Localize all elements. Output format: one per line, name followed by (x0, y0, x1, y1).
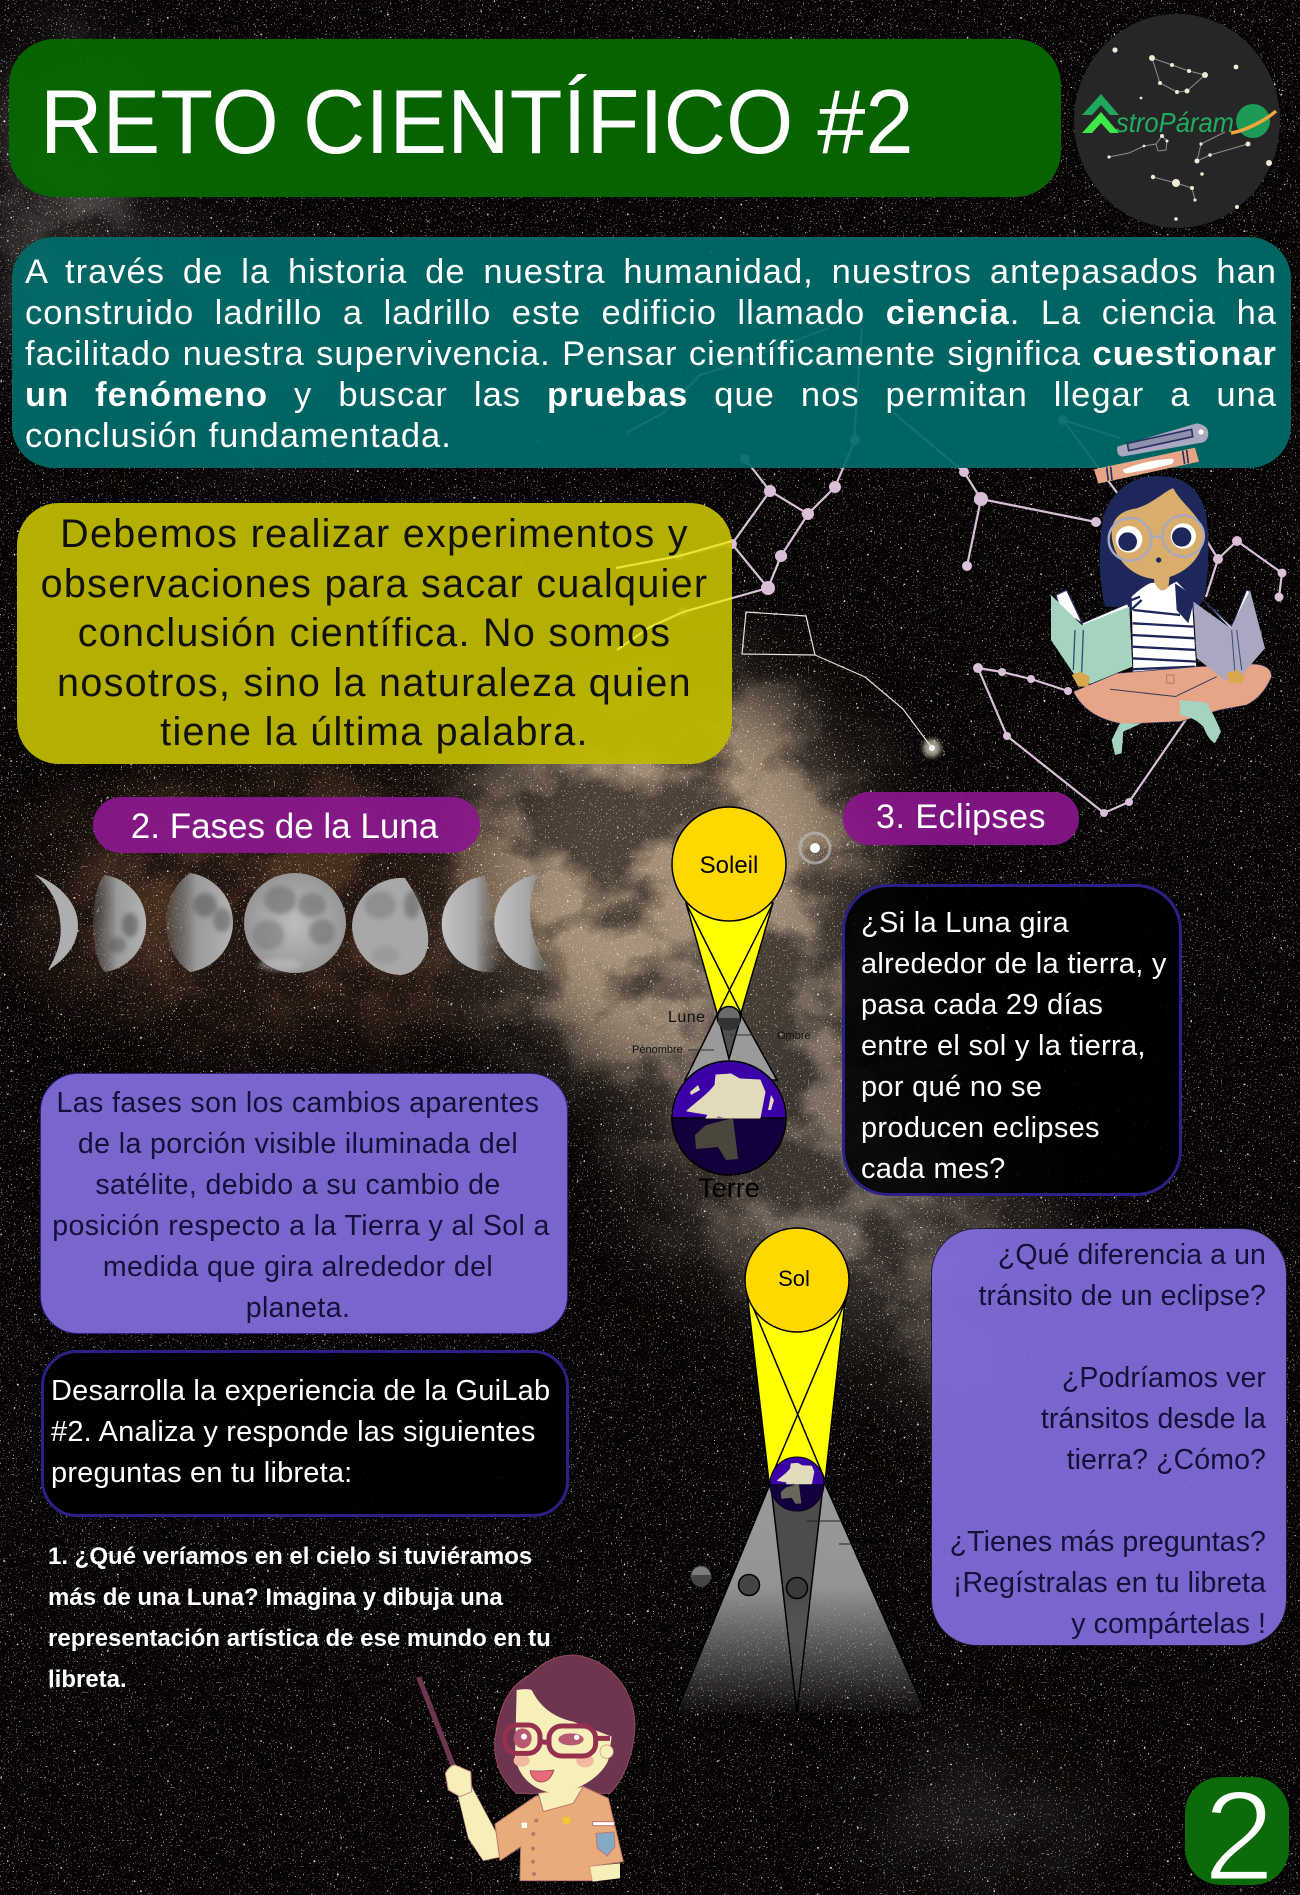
diagram: solar eclipse: Ombre (777, 1030, 811, 1042)
diagram: solar eclipse: Soleil (700, 852, 758, 879)
diagram: solar eclipse (632, 807, 811, 1203)
panel: moon phases explanation: Las fases son los cambios aparentes (57, 1087, 539, 1119)
glasses (505, 1725, 610, 1756)
diagram: solar eclipse: Pénombre (632, 1044, 683, 1056)
title text: RETO CIENTÍFICO #2 (40, 72, 914, 173)
panel: transit questions: ¡Regístralas en tu libreta (953, 1567, 1266, 1599)
intro paragraph panel: construido ladrillo a ladrillo este edificio llamado ciencia. La ciencia ha (25, 294, 1277, 332)
intro paragraph panel: un fenómeno y buscar las pruebas que nos permitan llegar a una (25, 376, 1277, 414)
panel: moon phases explanation (40, 1073, 568, 1334)
diagram: solar eclipse: Terre (698, 1173, 760, 1203)
hair (495, 1655, 635, 1793)
heading: eclipses: 3. Eclipses (876, 798, 1046, 836)
mouth (530, 1770, 554, 1782)
panel: eclipse question: ¿Si la Luna gira (861, 907, 1069, 939)
question 1 text (48, 1543, 551, 1693)
logo: astroparam (1074, 14, 1280, 228)
panel: eclipse question: alrededor de la tierra, y (861, 948, 1167, 980)
yellow callout panel (17, 503, 732, 764)
heading: fases de la luna (93, 797, 480, 853)
intro paragraph panel (12, 237, 1291, 468)
panel: transit questions: ¿Podríamos ver (1062, 1362, 1266, 1394)
panel: eclipse question: entre el sol y la tierra, (861, 1030, 1146, 1062)
intro paragraph panel: conclusión fundamentada. (25, 417, 452, 455)
panel: transit questions: y compártelas ! (1071, 1608, 1266, 1640)
panel: moon phases explanation: planeta. (246, 1292, 350, 1324)
panel: guilab instructions (41, 1350, 569, 1517)
diagram: lunar eclipse: Sol (778, 1266, 810, 1291)
icon: stacked books (1094, 423, 1208, 484)
question 1 text: 1. ¿Qué veríamos en el cielo si tuviéramos (48, 1543, 532, 1570)
diagram: lunar eclipse: Umbra (880, 1518, 910, 1529)
heading: eclipses (843, 792, 1079, 845)
panel: transit questions: ¿Tienes más preguntas? (950, 1526, 1266, 1558)
intro paragraph panel: facilitado nuestra supervivencia. Pensar científicamente significa cuestionar (25, 335, 1277, 373)
legs (1073, 664, 1272, 755)
heading: fases de la luna: 2. Fases de la Luna (131, 807, 438, 846)
panel: eclipse question: por qué no se (861, 1071, 1042, 1103)
logo: astroparam: stroPáram (1116, 107, 1234, 138)
intro paragraph panel: A través de la historia de nuestra humanidad, nuestros antepasados han (25, 253, 1277, 291)
diagram: lunar eclipse: Tierra (704, 1466, 761, 1491)
yellow callout panel: Debemos realizar experimentos y (60, 512, 689, 556)
illustration: teacher with pointer (416, 1655, 635, 1882)
panel: moon phases explanation: medida que gira alrededor del (103, 1251, 493, 1283)
glasses (1109, 515, 1204, 563)
panel: eclipse question: producen eclipses (861, 1112, 1100, 1144)
panel: guilab instructions: #2. Analiza y responde las siguientes (51, 1416, 536, 1448)
diagram: lunar eclipse (676, 1228, 927, 1713)
panel: transit questions: tránsito de un eclipse? (979, 1280, 1266, 1312)
panel: guilab instructions: preguntas en tu libreta: (51, 1457, 352, 1489)
panel: transit questions: tránsitos desde la (1041, 1403, 1266, 1435)
yellow callout panel: observaciones para sacar cualquier (41, 562, 708, 606)
book left (1051, 590, 1132, 687)
panel: eclipse question (842, 884, 1182, 1196)
question 1 text: representación artística de ese mundo en tu (48, 1625, 551, 1652)
face (515, 1689, 612, 1793)
diagram: lunar eclipse: Penumbra (880, 1541, 927, 1552)
panel: moon phases explanation: posición respecto a la Tierra y al Sol a (52, 1210, 550, 1242)
pointer stick (416, 1677, 469, 1799)
panel: eclipse question: pasa cada 29 días (861, 989, 1103, 1021)
panel: moon phases explanation: satélite, debido a su cambio de (95, 1169, 501, 1201)
panel: transit questions: ¿Qué diferencia a un (998, 1239, 1266, 1271)
constellation lines (616, 328, 1286, 817)
yellow callout panel: tiene la última palabra. (160, 710, 589, 754)
book right (1193, 590, 1265, 683)
arm and hand (445, 1765, 502, 1861)
question 1 text: más de una Luna? Imagina y dibuja una (48, 1584, 503, 1611)
question 1 text: libreta. (48, 1666, 127, 1693)
panel: transit questions (931, 1228, 1287, 1646)
diagram: solar eclipse: Lune (668, 1009, 705, 1026)
uniform shirt (495, 1787, 623, 1882)
page number badge (1185, 1765, 1289, 1895)
diagram: lunar eclipse: Luna (676, 1535, 721, 1557)
title banner (9, 39, 1061, 197)
yellow callout panel: conclusión científica. No somos (78, 611, 671, 655)
panel: moon phases explanation: de la porción visible iluminada del (78, 1128, 518, 1160)
yellow callout panel: nosotros, sino la naturaleza quien (57, 661, 692, 705)
illustration: girl reading (1051, 423, 1272, 755)
panel: transit questions: tierra? ¿Cómo? (1067, 1444, 1266, 1476)
panel: eclipse question: cada mes? (861, 1153, 1006, 1185)
panel: guilab instructions: Desarrolla la experiencia de la GuiLab (51, 1375, 550, 1407)
moon phases row (34, 873, 552, 975)
